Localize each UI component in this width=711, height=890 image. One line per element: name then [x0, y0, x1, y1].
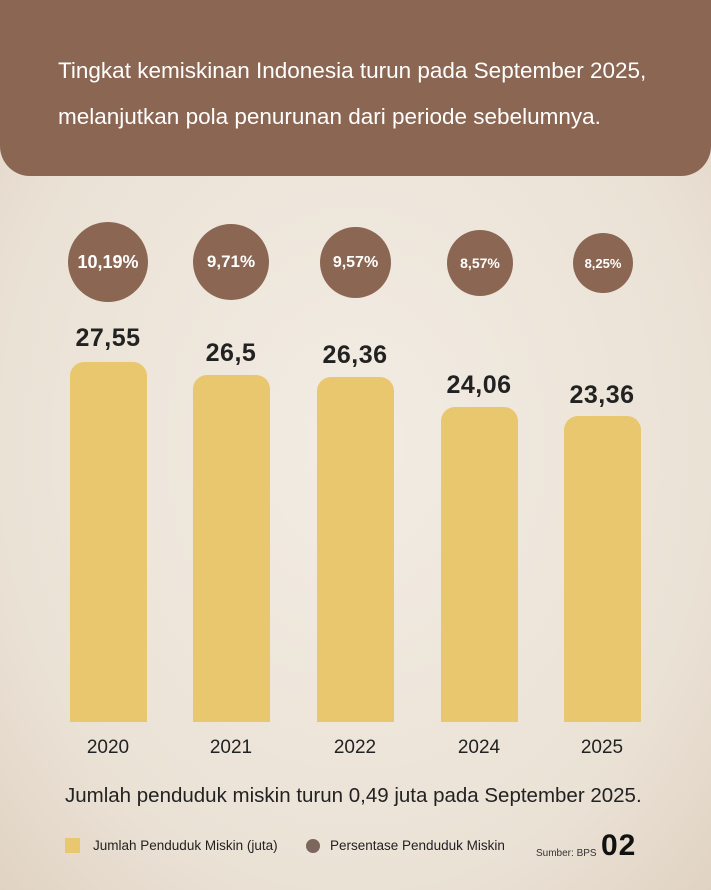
bar 2021 — [193, 375, 270, 722]
value 2025: 23,36 — [569, 381, 635, 409]
bar 2025 — [564, 416, 641, 722]
page number: 02 — [601, 829, 636, 862]
value 2024: 24,06 — [446, 371, 512, 399]
year 2020: 2020 — [87, 737, 129, 758]
circle 2022 — [320, 227, 391, 298]
circle 2021: 9,71% — [207, 252, 255, 271]
circle 2021 — [193, 224, 269, 300]
value 2021: 26,5 — [206, 339, 256, 367]
year 2022: 2022 — [334, 737, 376, 758]
circle 2020 — [68, 222, 148, 302]
legend: brown dot — [306, 839, 320, 853]
bar 2020 — [70, 362, 147, 722]
legend: label bars: Jumlah Penduduk Miskin (juta) — [93, 838, 278, 853]
legend: label circles: Persentase Penduduk Miskin — [330, 838, 505, 853]
circle 2025 — [573, 233, 633, 293]
circle 2024 — [447, 230, 513, 296]
header panel: Tingkat kemiskinan Indonesia turun pada September 2025, — [58, 58, 646, 83]
circle 2020: 10,19% — [77, 252, 139, 272]
title text — [58, 58, 646, 129]
header panel: melanjutkan pola penurunan dari periode sebelumnya. — [58, 104, 601, 129]
source: Sumber: BPS — [536, 848, 597, 859]
year 2025: 2025 — [581, 737, 623, 758]
header panel — [0, 0, 711, 176]
value 2022: 26,36 — [322, 341, 388, 369]
year 2024: 2024 — [458, 737, 500, 758]
summary text: Jumlah penduduk miskin turun 0,49 juta pada September 2025. — [65, 784, 642, 807]
year 2021: 2021 — [210, 737, 252, 758]
bar 2022 — [317, 377, 394, 722]
legend: yellow square — [65, 838, 80, 853]
circle 2022: 9,57% — [333, 254, 378, 270]
circle 2024: 8,57% — [460, 255, 500, 271]
bar 2024 — [441, 407, 518, 722]
circle 2025: 8,25% — [585, 256, 621, 270]
legend — [65, 838, 505, 853]
value 2020: 27,55 — [75, 324, 141, 352]
